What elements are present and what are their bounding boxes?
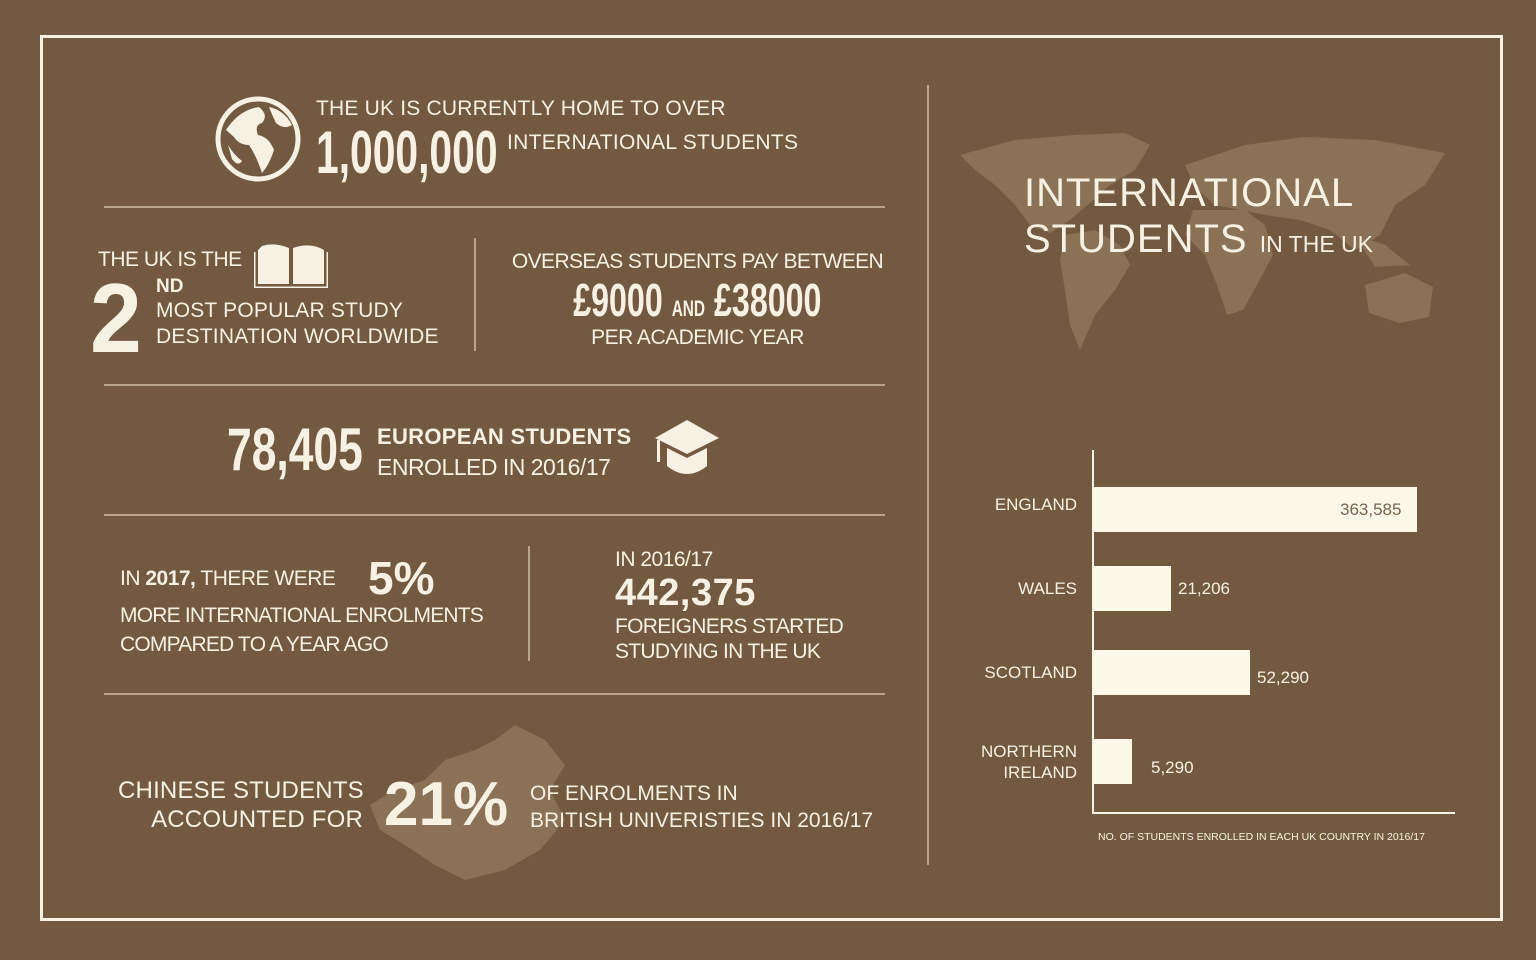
stat: 442,375 [615,548,843,663]
stat: 1,000,000 [216,96,798,186]
icon: graduation cap [655,420,719,474]
stat: chinese students: 21% [384,770,508,839]
bar chart: SCOTLAND [984,663,1077,682]
stat: fees: OVERSEAS STUDENTS PAY BETWEEN [512,250,883,273]
stat: 5% more: 5% [368,552,434,604]
stat: 1,000,000: INTERNATIONAL STUDENTS [507,131,798,154]
stat: 5% more: COMPARED TO A YEAR AGO [120,633,388,656]
bar chart: 21,206 [1178,579,1230,598]
world map background [960,133,1445,350]
stat: 5% more [120,552,483,656]
stat: chinese students: OF ENROLMENTS IN [530,782,738,805]
title: STUDENTS IN THE UK [1024,217,1373,261]
stat: 1,000,000: 1,000,000 [316,119,498,186]
title: INTERNATIONAL [1024,171,1354,215]
stat: european students [227,416,719,483]
stat: 5% more: MORE INTERNATIONAL ENROLMENTS [120,604,483,627]
bar chart: WALES [1018,579,1077,598]
stat: chinese students [118,770,873,839]
stat: fees [512,250,883,349]
stat: chinese students: BRITISH UNIVERISTIES IN 2016/17 [530,809,873,832]
bar chart: IRELAND [1003,763,1077,782]
stat: european students: ENROLLED IN 2016/17 [377,454,610,480]
stat: 1,000,000: THE UK IS CURRENTLY HOME TO OVER [316,97,726,120]
icon: book [254,244,328,288]
bar chart: 363,585 [1340,500,1401,519]
stat: 2nd most popular: MOST POPULAR STUDY [156,299,403,322]
bar chart: NO. OF STUDENTS ENROLLED IN EACH UK COUNTRY IN 2016/17 [1098,831,1425,843]
stat: fees: £9000 AND £38000 [573,274,822,326]
bar chart: NORTHERN [981,742,1077,761]
stat: 2nd most popular: ND [156,276,183,297]
stat: 5% more: IN 2017, THERE WERE [120,567,335,590]
stat: chinese students: ACCOUNTED FOR [151,806,363,833]
stat: fees: PER ACADEMIC YEAR [591,326,804,349]
stat: chinese students: CHINESE STUDENTS [118,777,364,804]
stat: 442,375: STUDYING IN THE UK [615,640,820,663]
stat: european students: EUROPEAN STUDENTS [377,424,631,449]
stat: 2nd most popular: THE UK IS THE [98,248,242,271]
stat: 2nd most popular [90,244,439,373]
icon: china map [370,725,565,880]
stat: 442,375: FOREIGNERS STARTED [615,615,843,638]
stat: 442,375: 442,375 [615,572,756,614]
bar chart: ENGLAND [995,495,1077,514]
stat: european students: 78,405 [227,416,363,483]
stat: 442,375: IN 2016/17 [615,548,713,571]
bar chart [981,450,1455,843]
title [1024,171,1373,261]
bar chart: 52,290 [1257,668,1309,687]
stat: 2nd most popular: DESTINATION WORLDWIDE [156,325,439,348]
bar chart: 5,290 [1151,758,1194,777]
stat: 2nd most popular: 2 [90,263,142,373]
icon: globe [216,96,300,182]
